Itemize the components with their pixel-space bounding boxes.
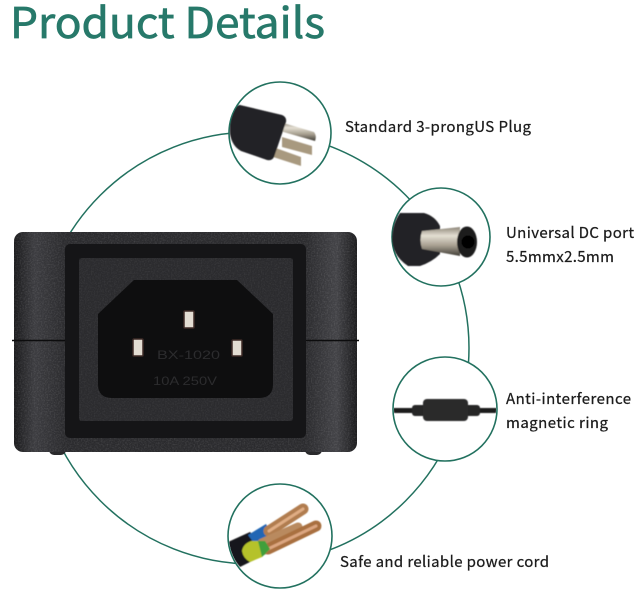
socket recess: [65, 244, 306, 438]
connector boot: [392, 213, 440, 266]
green-yellow wire: [241, 540, 264, 563]
blue wire: [247, 524, 268, 542]
copper strands: [262, 509, 316, 549]
label: DC port: [506, 222, 634, 267]
inlet pins: [133, 311, 242, 356]
label: magnetic ring: [506, 388, 631, 433]
inlet markings: 10A 250V: [153, 374, 217, 388]
label: magnetic ring: Anti-interference: [506, 388, 631, 409]
label: power cord: Safe and reliable power cord: [340, 551, 549, 572]
cable jacket: [228, 532, 270, 567]
connecting ring: [37, 132, 469, 564]
cable: [392, 408, 498, 413]
inlet markings: BX-1020: [157, 348, 220, 362]
ferrite core: [423, 399, 468, 421]
socket faceplate: [79, 258, 293, 421]
icon: DC barrel connector: [392, 188, 490, 286]
power adapter: [12, 232, 359, 455]
label: DC port: 5.5mmx2.5mm: [506, 246, 614, 267]
ground pin: [280, 122, 316, 141]
adapter body: [14, 232, 357, 452]
label: plug: Standard 3-prongUS Plug: [345, 116, 532, 137]
label: DC port: Universal DC port: [506, 222, 634, 243]
C14 inlet: [98, 280, 273, 398]
barrel tip: [457, 226, 477, 258]
icon: magnetic ring cable: [392, 357, 498, 461]
plug body: [230, 105, 286, 160]
plug blades: [274, 148, 302, 166]
adapter feet: [49, 445, 322, 455]
label: magnetic ring: magnetic ring: [506, 412, 609, 433]
icon: power cord: [228, 484, 332, 588]
icon: US plug: [229, 82, 331, 184]
barrel: [420, 227, 460, 256]
inlet markings: [153, 348, 220, 388]
